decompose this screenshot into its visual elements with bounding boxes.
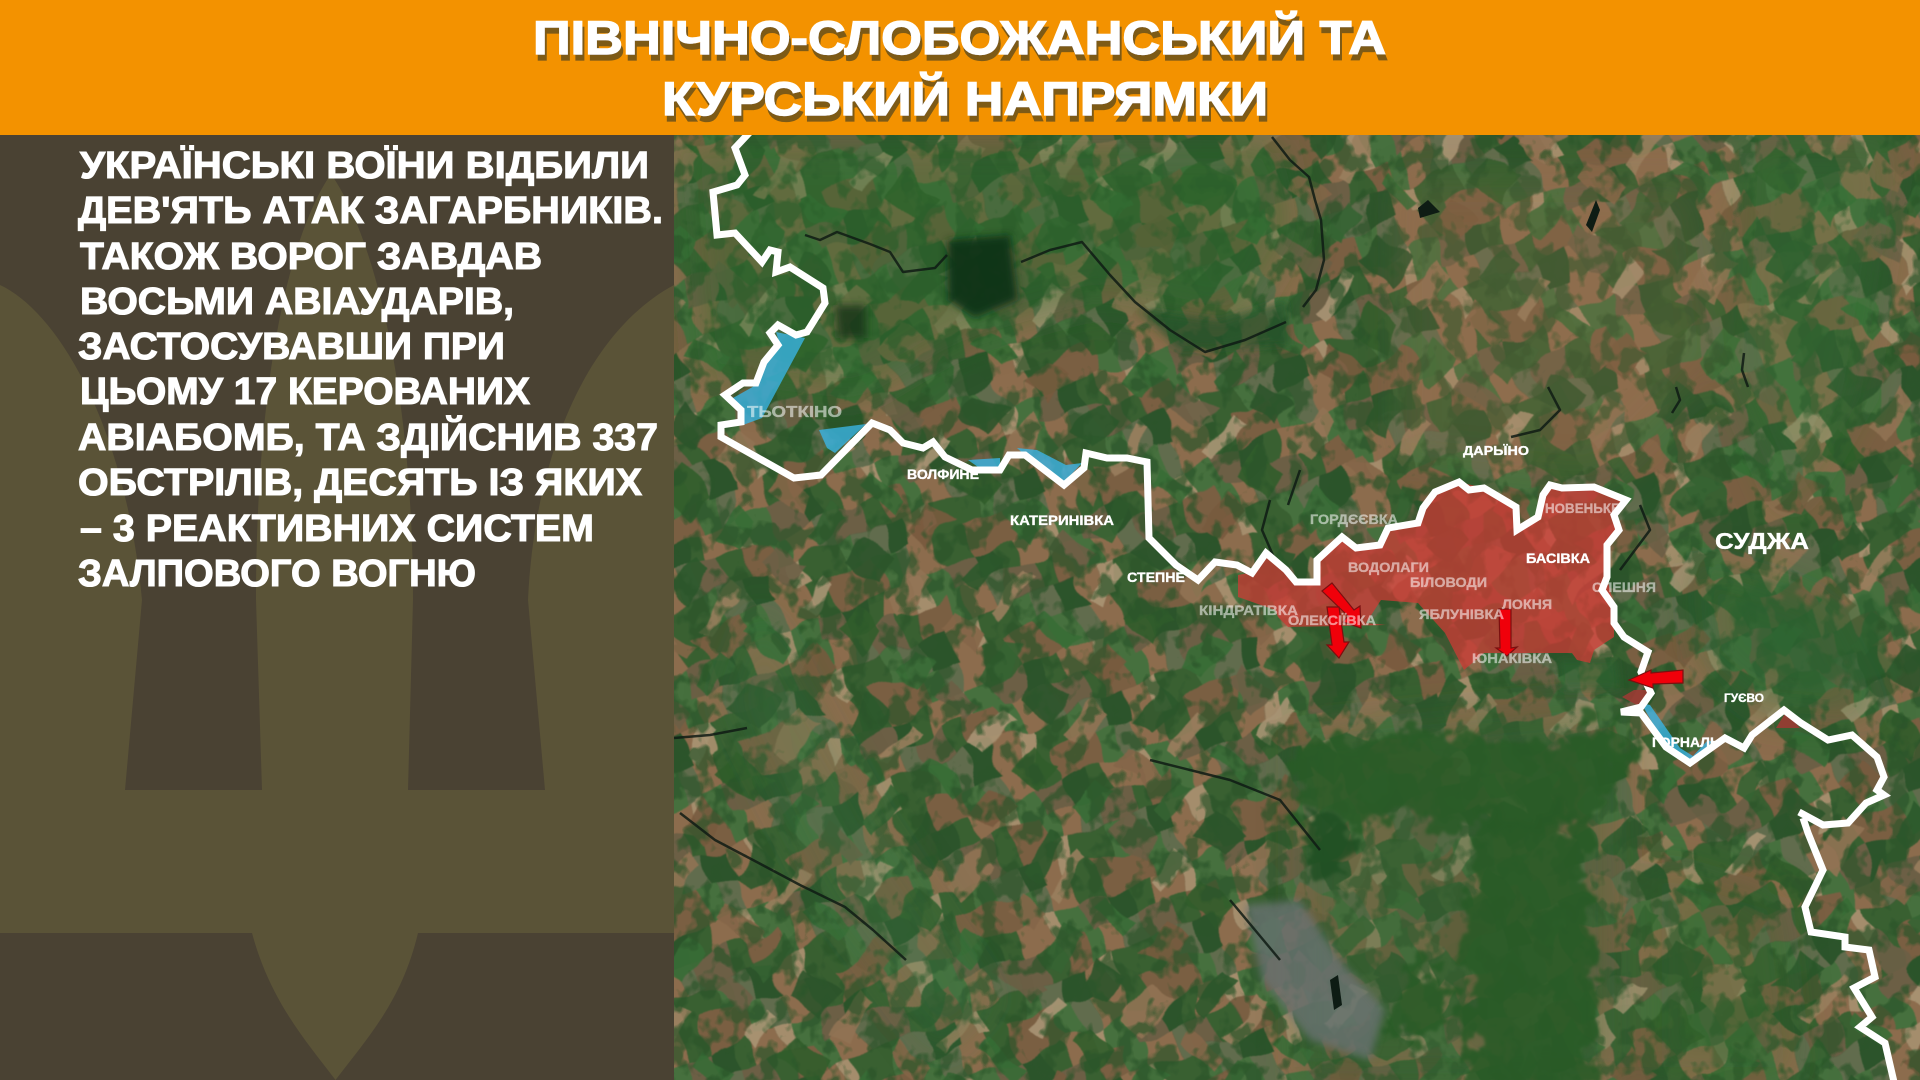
settlement labels: ВОЛФИНЕ: [907, 466, 979, 482]
map: satellite background: [640, 100, 1920, 1080]
settlement labels: [747, 404, 1809, 750]
small red zone near Горнальське: [1622, 690, 1651, 708]
text block: report: АВІАБОМБ, ТА ЗДІЙСНИВ 337: [78, 414, 658, 459]
arrow: attack near Юнаківка: [1496, 609, 1517, 656]
title: ПІВНІЧНО-СЛОБОЖАНСЬКИЙ ТА: [533, 11, 1386, 64]
arrow: attack from the east: [1629, 670, 1683, 688]
settlement labels: БАСІВКА: [1526, 550, 1590, 566]
settlement labels: КАТЕРИНІВКА: [1010, 512, 1114, 528]
text block: report: УКРАЇНСЬКІ ВОЇНИ ВІДБИЛИ: [80, 144, 649, 187]
arrow: attack south of Олексіївка: [1327, 607, 1349, 658]
settlement labels: ТЬОТКІНО: [747, 404, 842, 421]
settlement labels: ГУЄВО: [1724, 691, 1764, 705]
red occupied zone: [1238, 482, 1626, 670]
text block: report: ЦЬОМУ 17 КЕРОВАНИХ: [80, 371, 531, 413]
text block: report: – 3 РЕАКТИВНИХ СИСТЕМ: [80, 508, 594, 550]
text block: report: [78, 144, 663, 595]
border line: [713, 132, 1894, 1080]
arrow: attack towards Олексіївка: [1322, 583, 1361, 628]
text block: report: ЗАСТОСУВАВШИ ПРИ: [78, 326, 505, 368]
text block: report: ОБСТРІЛІВ, ДЕСЯТЬ ІЗ ЯКИХ: [78, 462, 643, 504]
text block: report: ВОСЬМИ АВІАУДАРІВ,: [80, 281, 514, 323]
settlement labels: СУДЖА: [1715, 528, 1809, 554]
settlement labels: ГОРДЄЄВКА: [1310, 511, 1398, 527]
settlement labels: ЯБЛУНІВКА: [1419, 606, 1504, 622]
settlement labels: БІЛОВОДИ: [1410, 574, 1487, 590]
settlement labels: НОВЕНЬКЕ: [1545, 500, 1620, 516]
settlement labels: ГОРНАЛЬ: [1652, 734, 1720, 750]
text block: report: ЗАЛПОВОГО ВОГНЮ: [78, 553, 476, 595]
settlement labels: КІНДРАТІВКА: [1199, 602, 1298, 618]
blue zones: [733, 332, 1712, 765]
text block: report: ДЕВ'ЯТЬ АТАК ЗАГАРБНИКІВ.: [78, 190, 663, 232]
settlement labels: СТЕПНЕ: [1127, 569, 1185, 585]
text block: report: ТАКОЖ ВОРОГ ЗАВДАВ: [80, 236, 542, 278]
title: [533, 11, 1386, 125]
title: КУРСЬКИЙ НАПРЯМКИ: [662, 72, 1268, 125]
settlement labels: ЛОКНЯ: [1502, 596, 1552, 612]
panel: left text panel: [0, 135, 674, 1080]
settlement labels: ОЛЕШНЯ: [1592, 579, 1656, 595]
settlement labels: ДАРЬЇНО: [1463, 443, 1529, 458]
settlement labels: ЮНАКІВКА: [1472, 650, 1552, 666]
settlement labels: ОЛЕКСІЇВКА: [1288, 612, 1376, 628]
icon: trident watermark: [0, 174, 674, 1080]
header bar: [0, 0, 1920, 135]
small red zone near Гуєво: [1776, 712, 1800, 728]
settlement labels: ВОДОЛАГИ: [1348, 559, 1429, 575]
